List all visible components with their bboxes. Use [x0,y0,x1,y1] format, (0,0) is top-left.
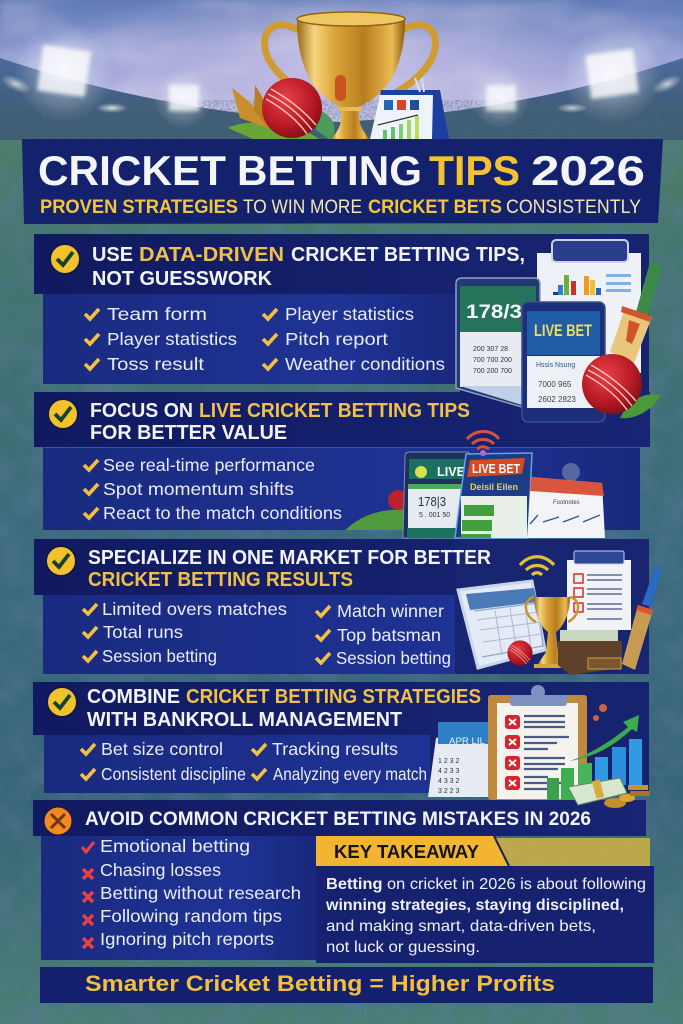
takeaway text: and making smart, data-driven bets, [326,918,596,935]
illustration: clipboard, phones, bat and ball [456,240,662,422]
stadium floodlights [0,22,683,128]
heading [90,400,470,444]
checklist [81,739,427,784]
icon: wifi signal [520,557,554,575]
panel 4: bankroll management [33,682,650,808]
illustration: calendar, clipboard, bars and money: 4 2 3 3 [438,768,460,775]
checklist: Spot momentum shifts [103,479,294,499]
panel 5: avoid common mistakes [33,800,646,960]
illustration: live bet phones and chart card: LIVE BET [472,461,520,476]
subtitle: PROVEN STRATEGIES [40,196,238,218]
checklist: See real-time performance [103,455,315,475]
heading: DATA-DRIVEN [139,244,284,266]
subtitle [40,196,641,218]
checklist [83,599,451,668]
bottom banner [40,967,653,1003]
checklist: Limited overs matches [102,599,287,619]
heading: NOT GUESSWORK [92,268,273,290]
panel 1: data-driven tips [34,234,662,422]
illustration: calendar, clipboard, bars and money: 4 3 3 2 [438,778,460,785]
illustration: live bet phones and chart card: 178|3 [418,494,446,509]
heading [87,686,481,731]
check icon [47,687,77,717]
checklist [84,455,342,523]
checklist: React to the match conditions [103,503,342,523]
illustration: clipboard, phones, bat and ball: 200 307 28 [473,346,508,353]
illustration: calendar, clipboard, bars and money [428,685,650,808]
main title: TIPS [429,147,520,194]
list of mistakes: Chasing losses [100,860,221,880]
heading: CRICKET BETTING RESULTS [88,569,353,591]
main title: 2026 [531,147,645,194]
heading: CRICKET BETTING TIPS, [291,244,525,266]
list of mistakes [82,836,301,949]
checklist: Session betting [336,648,451,668]
checklist: Top batsman [337,625,441,645]
heading [92,244,525,290]
main title: BETTING [237,147,422,194]
illustration: clipboard, phones, bat and ball: 7000 965 [538,380,572,389]
title banner [22,139,663,224]
heading: LIVE CRICKET BETTING TIPS [199,400,470,422]
illustration: clipboard, phones, bat and ball: LIVE BET [534,321,592,340]
heading: FOCUS ON [90,400,193,422]
illustration: clipboard, phones, bat and ball: 700 200 700 [473,368,512,375]
list of mistakes: Emotional betting [100,836,250,856]
main title: CRICKET [38,147,226,194]
panel 3: specialize in one market [34,539,662,675]
checklist: Player statistics [107,329,237,349]
illustration: live bet phones and chart card [345,432,605,538]
icon: clipboard with chart [370,78,449,139]
list of mistakes: Ignoring pitch reports [100,929,274,949]
illustration: live bet phones and chart card: LIVE [437,464,465,479]
checklist: Total runs [103,622,183,642]
takeaway text: winning strategies, staying disciplined, [325,897,624,914]
checklist: Analyzing every match [273,764,427,784]
illustration: clipboard, phones, bat and ball: 2602 2823 [538,395,576,404]
illustration: calendar, clipboard, bars and money: 3 2 2 3 [438,788,460,795]
heading: USE [92,244,133,266]
illustration: live bet phones and chart card: Footnotes [553,500,580,506]
illustration: calendar, trophy, wallet, bat [458,551,662,675]
checklist: Session betting [102,646,217,666]
checklist [85,304,445,374]
main title [38,147,645,194]
panel 2: live betting [34,392,650,538]
icon: gold trophy with cricket ball and clipboard [228,12,449,142]
list of mistakes: Betting without research [100,883,301,903]
illustration: calendar, clipboard, bars and money: APR LIL [449,736,485,746]
key takeaway label: KEY TAKEAWAY [334,842,479,862]
takeaway text: Betting on cricket in 2026 is about following [326,876,646,893]
subtitle: TO WIN MORE [243,196,362,218]
heading: COMBINE [87,686,180,708]
checklist: Match winner [337,601,444,621]
illustration: calendar, clipboard, bars and money: 1 2 3 2 [438,758,460,765]
checklist: Weather conditions [285,354,445,374]
illustration: clipboard, phones, bat and ball: Hssis Nsung [536,362,575,369]
subtitle: CRICKET BETS [368,196,502,218]
illustration: clipboard, phones, bat and ball: 700 700 200 [473,357,512,364]
heading: SPECIALIZE IN ONE MARKET FOR BETTER [88,547,492,569]
check icon [50,244,80,274]
illustration: live bet phones and chart card: Deisil Eilen [470,482,518,492]
key takeaway box [316,836,654,963]
takeaway text: not luck or guessing. [326,939,480,956]
heading [88,547,492,591]
icon: wifi signal [467,432,499,456]
slogan: Smarter Cricket Betting = Higher Profits [85,971,555,996]
check icon [46,546,76,576]
checklist: Pitch report [285,329,388,349]
illustration: live bet phones and chart card: 5 . 001 50 [419,512,450,519]
checklist: Bet size control [101,739,223,759]
checklist: Toss result [107,354,204,374]
warning icon [44,807,72,835]
checklist: Player statistics [285,304,414,324]
checklist: Consistent discipline [101,764,246,784]
takeaway text [325,876,646,956]
check icon [48,399,78,429]
heading: AVOID COMMON CRICKET BETTING MISTAKES IN 2026 [85,809,591,830]
heading: CRICKET BETTING STRATEGIES [186,686,481,708]
checklist: Tracking results [272,739,398,759]
heading: FOR BETTER VALUE [90,422,287,444]
subtitle: CONSISTENTLY [506,196,641,218]
heading: WITH BANKROLL MANAGEMENT [87,709,402,731]
illustration: clipboard, phones, bat and ball: 178/3 [466,302,522,323]
checklist: Team form [107,304,207,324]
list of mistakes: Following random tips [100,906,282,926]
